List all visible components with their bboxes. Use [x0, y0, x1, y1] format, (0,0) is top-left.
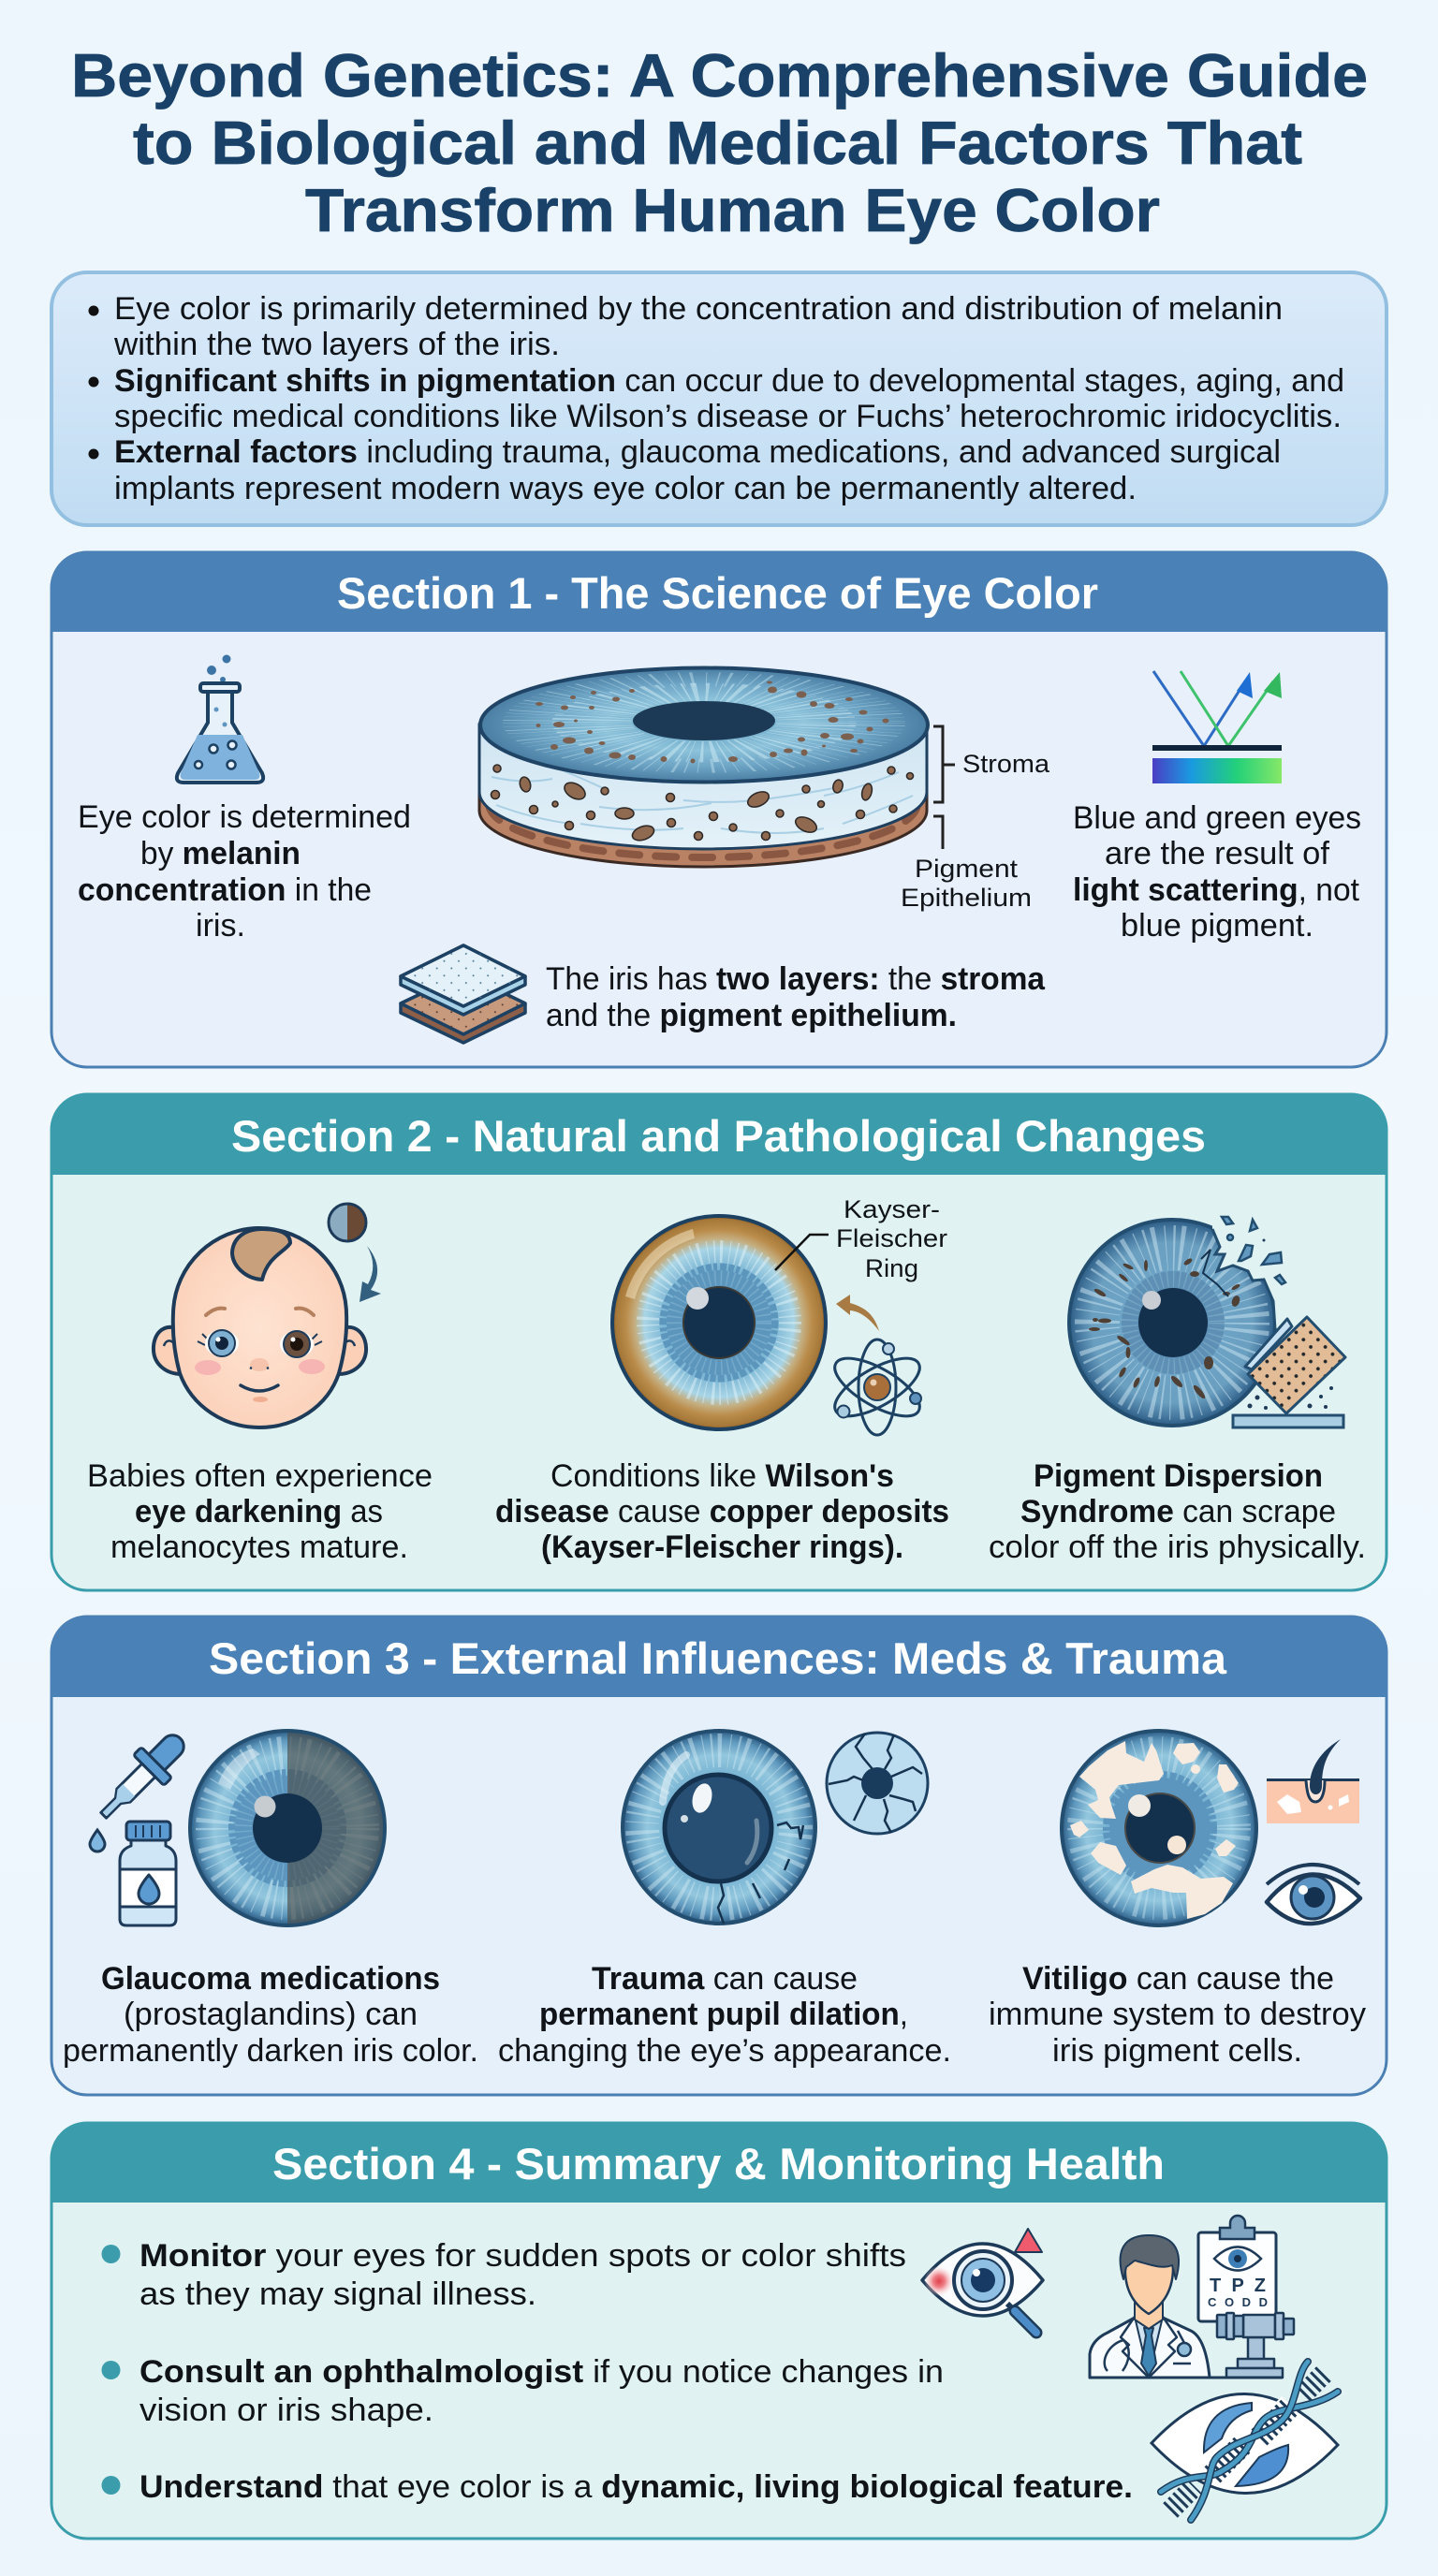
icon: cracked iris inset [827, 1733, 928, 1834]
section 1 header bar [51, 552, 1387, 632]
text block: bullet one: Eye color is primarily determined by the concentration and distribution of melanin [114, 291, 1283, 327]
iris top surface [480, 668, 928, 783]
text block: pigment dispersion: Syndrome can scrape [1020, 1494, 1336, 1530]
section 2 header bar [51, 1094, 1387, 1175]
section 4 heading: Section 4 - Summary & Monitoring Health [272, 2139, 1165, 2188]
text block: bullet one [88, 291, 1283, 362]
text block: Wilson's disease: Conditions like Wilson's [550, 1458, 894, 1494]
icon: eye with DNA helix [1152, 2362, 1338, 2520]
text block: light scattering: Blue and green eyes [1073, 800, 1361, 836]
panel: section 3 [51, 1617, 1387, 2095]
text block: melanin: iris. [196, 908, 245, 944]
text block: light scattering: blue pigment. [1121, 908, 1313, 944]
icon: dilated pupil iris [623, 1731, 815, 1924]
text block: Wilson's disease: (Kayser-Fleischer rings). [541, 1530, 903, 1565]
title: Transform Human Eye Color [305, 176, 1160, 244]
text block: glaucoma medications: (prostaglandins) can [124, 1997, 418, 2032]
bullet: monitor: as they may signal illness. [139, 2276, 536, 2312]
text block: eye darkening: eye darkening as [135, 1494, 383, 1530]
text block: melanin [78, 799, 411, 944]
bullet: understand: Understand that eye color is a dynamic, living biological feature. [139, 2469, 1133, 2505]
icon: iris with pigment scraping [1069, 1220, 1275, 1426]
icon: copper atom [827, 1339, 928, 1435]
text block: trauma: Trauma can cause [592, 1961, 858, 1997]
bullet: consult [101, 2354, 944, 2428]
icon: iris half darkened [190, 1731, 385, 1925]
icon: doctor [1090, 2235, 1210, 2378]
panel: section 2 [51, 1094, 1387, 1590]
panel: section 4 [51, 2123, 1387, 2539]
bullet: monitor: Monitor your eyes for sudden spots or color shifts [139, 2238, 906, 2274]
icon: flask [177, 655, 263, 783]
text block: eye darkening [87, 1458, 433, 1565]
text block: Wilson's disease [495, 1458, 949, 1565]
icon: light scattering [1152, 671, 1282, 783]
text block: glaucoma medications [63, 1961, 478, 2069]
pigment epithelium bracket and label [901, 816, 1032, 912]
text block: melanin: concentration in the [78, 872, 372, 908]
text block: melanin: by melanin [140, 836, 301, 871]
panel: introduction key points [51, 272, 1387, 525]
icon: iris with vitiligo [1062, 1731, 1256, 1925]
arrow: copper to ring [836, 1295, 879, 1331]
stroma bracket and label [933, 726, 1050, 802]
icon: eye colour change with arrow [329, 1204, 381, 1302]
text block: bullet three [88, 434, 1281, 506]
text block: light scattering [1073, 800, 1361, 944]
icon: skin with hair follicle [1267, 1739, 1359, 1823]
Kayser-Fleischer label with leader: Kayser- [844, 1195, 940, 1223]
icon: eye chart: T P Z [1210, 2276, 1266, 2296]
icon: iris with Kayser-Fleischer ring [612, 1216, 826, 1429]
Kayser-Fleischer label with leader [775, 1195, 947, 1282]
melanin spots in stroma [491, 765, 914, 843]
section 2 heading: Section 2 - Natural and Pathological Changes [231, 1111, 1206, 1161]
text block: pigment dispersion: color off the iris physically. [989, 1530, 1366, 1565]
text block: bullet two: Significant shifts in pigmentation can occur due to developmental stages, aging, and [114, 363, 1344, 399]
text block: bullet two [88, 363, 1344, 434]
icon: dropper [88, 1723, 196, 1831]
text block: vitiligo: Vitiligo can cause the [1022, 1961, 1334, 1997]
icon: small eye [1267, 1865, 1360, 1924]
section 1 heading: Section 1 - The Science of Eye Color [337, 568, 1098, 618]
text block: trauma: changing the eye’s appearance. [498, 2033, 951, 2069]
title: Beyond Genetics: A Comprehensive Guide [71, 41, 1368, 110]
text block: bullet two: specific medical conditions like Wilson’s disease or Fuchs’ heterochromic iridocyclitis. [114, 399, 1342, 434]
icon: broken iris edge and fragments [1212, 1208, 1311, 1329]
text block: light scattering: are the result of [1105, 836, 1330, 871]
Kayser-Fleischer label with leader: Fleischer [836, 1224, 947, 1252]
pigment epithelium bracket and label: Pigment [915, 855, 1019, 883]
stroma bracket and label: Stroma [962, 750, 1050, 778]
text block: eye darkening: Babies often experience [87, 1458, 433, 1494]
text block: bullet one: within the two layers of the iris. [113, 327, 560, 362]
text block: pigment dispersion: Pigment Dispersion [1034, 1458, 1323, 1494]
Kayser-Fleischer label with leader: Ring [865, 1254, 918, 1282]
text block: vitiligo: iris pigment cells. [1052, 2033, 1302, 2069]
text block: vitiligo [989, 1961, 1366, 2069]
text block: bullet three: External factors including trauma, glaucoma medications, and advanced surgical [114, 434, 1281, 470]
icon: eye chart [1198, 2216, 1276, 2321]
text block: two layers: and the pigment epithelium. [546, 998, 957, 1033]
doctor base line [1089, 2376, 1283, 2379]
section 3 header bar [51, 1617, 1387, 1697]
bullet: consult: Consult an ophthalmologist if you notice changes in [139, 2354, 944, 2390]
pigment epithelium bracket and label: Epithelium [901, 884, 1032, 912]
text block: pigment dispersion [989, 1458, 1366, 1565]
text block: melanin: Eye color is determined [78, 799, 411, 835]
text block: two layers [546, 961, 1046, 1033]
icon: magnified eye with warning [922, 2229, 1043, 2333]
text block: eye darkening: melanocytes mature. [110, 1530, 408, 1565]
icon: medicine bottle [120, 1822, 176, 1925]
text block: two layers: The iris has two layers: the stroma [546, 961, 1046, 997]
icon: eye chart: C O D D [1208, 2295, 1268, 2309]
title: to Biological and Medical Factors That [133, 109, 1302, 177]
text block: trauma: permanent pupil dilation, [539, 1997, 908, 2032]
text block: Wilson's disease: disease cause copper deposits [495, 1494, 949, 1530]
text block: glaucoma medications: Glaucoma medications [101, 1961, 440, 1997]
text block: bullet three: implants represent modern ways eye color can be permanently altered. [114, 471, 1137, 506]
section 4 header bar [51, 2123, 1387, 2203]
icon: two stacked layers [401, 945, 525, 1043]
icon: drop [90, 1830, 105, 1852]
text block: vitiligo: immune system to destroy [989, 1997, 1366, 2032]
iris cross-section diagram [479, 668, 928, 867]
bullet: monitor [101, 2238, 906, 2312]
title [71, 41, 1368, 244]
icon: phoropter on stand [1217, 2313, 1294, 2378]
text block: trauma [498, 1961, 951, 2069]
text block: light scattering: light scattering, not [1073, 872, 1360, 908]
text block: glaucoma medications: permanently darken iris color. [63, 2033, 478, 2069]
icon: baby face [154, 1228, 366, 1427]
section 3 heading: Section 3 - External Influences: Meds & Trauma [209, 1633, 1227, 1683]
melanin spots on iris [536, 681, 889, 764]
panel: section 1 [51, 552, 1387, 1067]
icon: scraping plate [1233, 1317, 1345, 1427]
bullet: consult: vision or iris shape. [139, 2393, 433, 2428]
